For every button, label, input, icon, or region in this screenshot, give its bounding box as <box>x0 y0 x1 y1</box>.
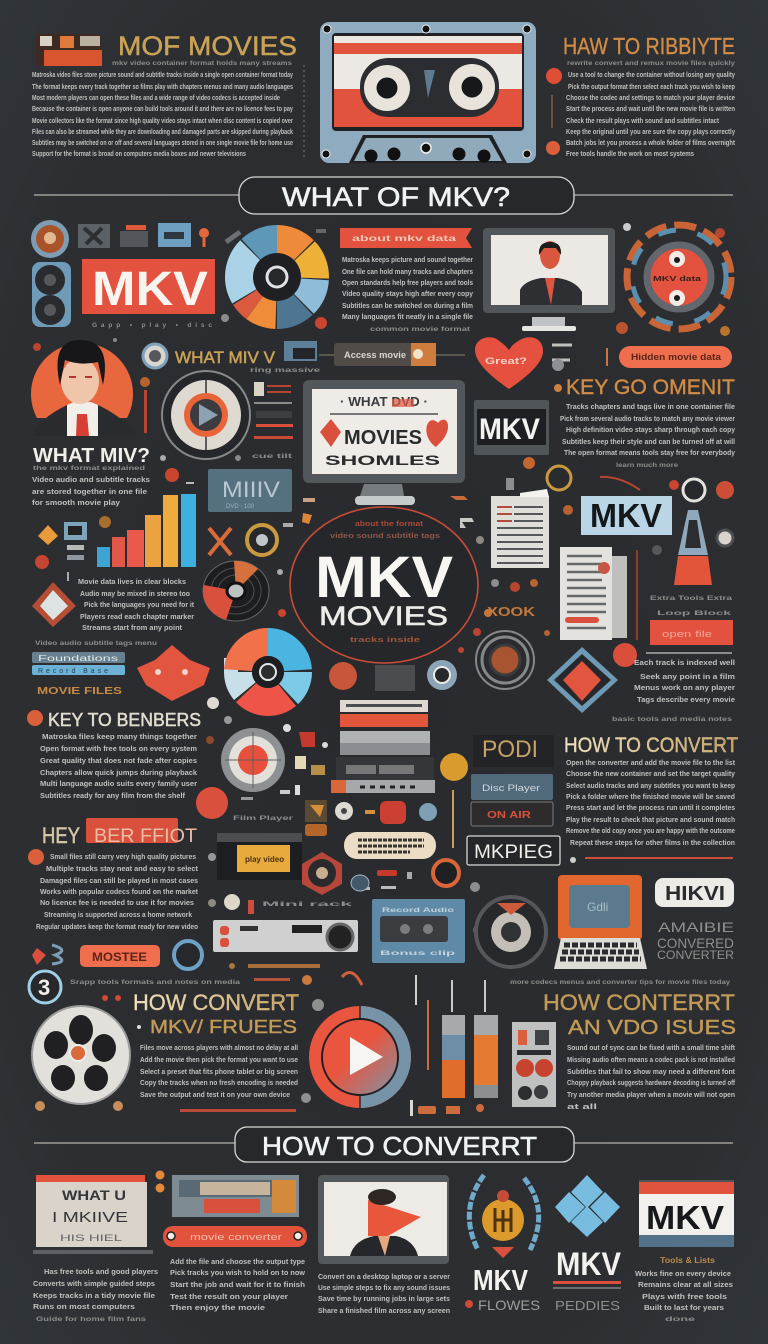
projector <box>213 920 358 952</box>
text block: intro left: mkv video container format holds many streams <box>112 60 292 67</box>
blue media card: MIIIV <box>222 477 280 502</box>
subheading: av issues: AN VDO ISUES <box>568 1017 736 1039</box>
text block: intro left: Files can also be streamed while they are downloading and damaged parts are skipped during playback <box>32 127 294 136</box>
converter caption: CONVERTER <box>657 948 734 962</box>
text block: bottom left: Runs on most computers <box>33 1302 135 1311</box>
text block: key to benbers: Matroska files keep many things together <box>42 732 197 741</box>
text block: bottom left: Has free tools and good players <box>44 1267 158 1276</box>
text block: what miv: Video audio and subtitle tracks <box>32 475 150 484</box>
monitor with presenter <box>483 228 615 331</box>
central mkv movies badge: video sound subtitle tags <box>330 533 440 540</box>
blue cassette card: Bonus clip <box>380 950 455 957</box>
text block: hey benefit <box>28 849 198 931</box>
bottom card: what is mkv: HIS HIEL <box>60 1233 122 1243</box>
text block: key to benbers <box>40 732 198 800</box>
blue media card <box>208 469 292 512</box>
text block: intro left <box>32 60 294 158</box>
media screenshot strip <box>172 1175 299 1217</box>
text block: key content: Pick from several audio tracks to match any movie viewer <box>560 414 735 423</box>
text block: intro right <box>566 60 736 158</box>
text block: key content: Subtitles keep their style and can be turned off at will <box>562 437 735 446</box>
mkpieg box <box>467 836 560 865</box>
row of glyphs <box>233 790 453 848</box>
orange label: xook: XOOK <box>487 604 536 619</box>
red ribbon: about mkv data <box>352 234 457 243</box>
text block: how to convert: Play the result to check that picture and sound match <box>566 815 735 824</box>
text block: hey benefit: Streaming is supported across a home network <box>44 910 193 919</box>
dark player with yellow screen: play video <box>245 855 284 864</box>
film reel <box>32 1006 130 1104</box>
dark player with yellow screen <box>217 833 302 880</box>
red banner with caption: Loop Block <box>657 610 732 617</box>
text block: av issues: Missing audio often means a codec pack is not installed <box>567 1055 735 1064</box>
heading: how converrt: HOW CONTERRT <box>543 990 735 1015</box>
text block: bottom center <box>318 1272 450 1315</box>
rings target icon <box>476 631 534 689</box>
text block: bottom left <box>33 1267 158 1323</box>
emblem dark red <box>302 852 342 895</box>
subheading: mkv fruees: MKV/ FRUEES <box>150 1017 297 1037</box>
vinyl record <box>203 561 269 621</box>
icon group with pill <box>32 941 202 969</box>
text block: bottom left: Guide for home film fans <box>36 1316 147 1323</box>
icon: speaker <box>32 262 71 327</box>
heading: how to rewrite: HAW TO RIBBIYTE <box>563 33 735 59</box>
text block: what miv: for smooth movie play <box>32 498 121 507</box>
glyph cluster near pill <box>552 345 607 371</box>
big play button <box>309 1006 411 1108</box>
text block: how convert: Save the output and test it on your own device <box>140 1090 290 1099</box>
diamond compass icon <box>32 582 76 627</box>
red ribbon <box>340 228 472 248</box>
text block: how to convert: Open the converter and add the movie file to the list <box>566 758 735 767</box>
mkpieg box: MKPIEG <box>474 842 553 863</box>
text block: bottom left: Converts with simple guided steps <box>33 1279 155 1288</box>
text block: ribbon paragraph: Video quality stays high after every copy <box>342 289 474 298</box>
text block: key content <box>560 402 736 469</box>
target icon <box>221 728 285 792</box>
label row: what miv v: ring massive <box>250 367 321 374</box>
text block: intro left: Matroska video files store picture sound and subtitle tracks inside a single open container format today <box>32 70 294 79</box>
hikvi card: HIKVI <box>665 883 725 905</box>
heading: hey benefit: HEY <box>42 823 80 848</box>
blue card and red card: ON AIR <box>487 810 532 821</box>
text block: left middle: Players read each chapter marker <box>80 612 194 621</box>
icon: crossed tools and ring <box>209 525 277 555</box>
blue diamonds logo <box>555 1175 620 1237</box>
text block: right of diamond: Menus work on any player <box>634 683 735 692</box>
orange retro computer <box>554 875 647 969</box>
scattered small glyphs <box>33 223 730 985</box>
text block: key content: learn much more <box>616 462 678 469</box>
color wheel 1 <box>240 240 314 314</box>
text block: bottom mid left: Then enjoy the movie <box>170 1303 265 1312</box>
text block: av issues: at all <box>567 1102 597 1111</box>
heading: how to convert: HOW TO CONVERT <box>564 734 738 757</box>
play disc icon <box>162 371 250 459</box>
orange pill <box>619 346 732 368</box>
text block: intro left: Because the container is open anyone can build tools around it and there are no licence fees to pay <box>32 104 294 113</box>
small list beside disc: cue tilt <box>252 453 294 460</box>
text block: av issues <box>567 1043 735 1111</box>
text block: ribbon paragraph: Open standards help free players and tools <box>342 278 473 287</box>
converter caption <box>657 919 734 962</box>
text block: how to convert: Press start and let the process run until it completes <box>566 803 735 812</box>
bottom card: what is mkv: WHAT U <box>62 1187 126 1203</box>
blue labels left: Video audio subtitle tags menu <box>35 640 157 647</box>
caption row of icons: Mini rack <box>262 901 353 908</box>
text block: how convert: Copy the tracks when no fresh encoding is needed <box>140 1078 298 1087</box>
text block: hey benefit: No licence fee is needed to use it for movies <box>40 898 194 907</box>
red banner with caption: Extra Tools Extra <box>650 595 733 602</box>
icon: timeline dots <box>304 65 562 157</box>
heading: mof movies: MOF MOVIES <box>118 31 297 61</box>
heart badge: Great? <box>485 356 527 366</box>
blue cassette card: Record Audio <box>382 907 454 914</box>
circular arrows badge: MKV data <box>653 276 701 283</box>
circular arrows badge <box>627 225 731 329</box>
text block: bottom left: Keeps tracks in a tidy movie file <box>33 1291 155 1300</box>
text block: right of diamond: Tags describe every movie <box>637 695 735 704</box>
pill: what label: Access movie <box>344 350 406 360</box>
bottom monitor with figure <box>318 1175 449 1264</box>
mkv peddies label <box>553 1246 622 1313</box>
text block: right of diamond: basic tools and media notes <box>612 716 733 723</box>
small caption row: Gapp • play • disc <box>92 322 212 329</box>
central monitor: MOVIES <box>344 427 422 449</box>
text block: hey benefit: Regular updates keep the format ready for new video <box>36 922 198 931</box>
central monitor: · WHAT DVD · <box>340 394 428 409</box>
text block: bottom mid left: Pick tracks you wish to hold on to now <box>170 1268 305 1277</box>
orange retro computer: Gdli <box>587 900 608 914</box>
red pill <box>163 1226 307 1247</box>
bottom card: what is mkv: I MKIIVE <box>52 1209 128 1226</box>
orange dots <box>156 1170 164 1192</box>
ring orange <box>433 860 459 886</box>
numbered badge 3: 3 <box>38 975 50 1000</box>
central monitor: SHOMLES <box>325 452 440 468</box>
text block: intro left: The format keeps every track together so films play with chapters menus and many audio languages <box>32 82 293 91</box>
text block: key to benbers: Multi language audio suits every family user <box>40 779 197 788</box>
row of glyphs: Film Player <box>233 815 294 822</box>
section banner: how to converrt <box>34 1127 733 1162</box>
text block: intro left: Subtitles may be switched on or off and several languages stored in one single movie file for home use <box>32 138 293 147</box>
text block: how to convert: Select audio tracks and any subtitles you want to keep <box>566 781 735 790</box>
text block: bottom center: Use simple steps to fix any sound issues <box>318 1283 450 1292</box>
icon group with pill: MOSTEE <box>92 950 147 964</box>
label: podi: PODI <box>482 736 538 763</box>
text block: how to convert <box>566 758 736 847</box>
heading: what miv: WHAT MIV? <box>33 445 150 467</box>
glyphs near play <box>35 999 484 1116</box>
text block: av issues: Sound out of sync can be fixed with a small time shift <box>567 1043 735 1052</box>
text block: intro left: Movie collectors like the format since high quality video stays intact when disc content is copied over <box>32 116 293 125</box>
text block: bottom right: Built to last for years <box>644 1303 724 1312</box>
text block: ribbon paragraph: Subtitles can be switched on during a film <box>342 301 473 310</box>
gold caption: MOVIE FILES <box>37 686 122 697</box>
text block: left middle: Streams start from any point <box>82 623 182 632</box>
mkv white card: MKV <box>646 1199 724 1236</box>
text block: key content: The open format means tools stay free for everybody <box>564 448 736 457</box>
text block: bottom center: Share a finished film across any screen <box>318 1306 450 1315</box>
equipment stack <box>331 700 435 793</box>
text block: what miv <box>32 465 150 507</box>
mkv dark screen <box>474 400 549 455</box>
text block: key to benbers: Open format with free tools on every system <box>40 744 197 753</box>
blue labels left: Record Base <box>38 668 108 675</box>
text block: how to convert: Repeat these steps for other films in the collection <box>570 838 735 847</box>
control panel <box>512 1022 556 1107</box>
blue card and red card: Disc Player <box>482 783 540 793</box>
mkv flowes label: MKV <box>473 1265 529 1297</box>
heading: hey benefit: BER FFIOT <box>94 826 197 847</box>
text block: ribbon paragraph: Matroska keeps picture and sound together <box>342 255 473 264</box>
text block: bottom right: done <box>665 1316 696 1323</box>
text block: intro left: Most modern players can open these files and a wide range of video codecs is accepted inside <box>32 93 280 102</box>
mkv white card <box>639 1180 734 1247</box>
text block: ribbon paragraph: Many languages fit neatly in a single file <box>342 312 473 321</box>
text block: bottom center: Save time by running jobs in large sets <box>318 1294 450 1303</box>
blue cassette card <box>372 899 465 963</box>
text block: intro right: rewrite convert and remux movie files quickly <box>567 60 735 67</box>
avatar: man in suit <box>31 340 135 436</box>
text block: bottom mid left: Start the job and wait for it to finish <box>170 1280 305 1289</box>
section banner: what of mkv <box>34 177 733 214</box>
text block: intro left: Support for the format is broad on computers media boxes and newer televisions <box>32 149 246 158</box>
converter caption: CONVERED <box>657 935 734 951</box>
text block: how convert: Files move across players with almost no delay at all <box>140 1043 298 1052</box>
red banner with caption <box>646 595 733 654</box>
label: podi <box>473 735 554 767</box>
text block: bottom mid left: Add the file and choose the output type <box>170 1257 305 1266</box>
converter caption: AMAIBIE <box>658 919 734 935</box>
small center devices <box>329 660 457 691</box>
mkv blue card: MKV <box>590 497 662 534</box>
icon: speaker disc <box>31 220 69 258</box>
red pill: movie converter <box>190 1232 282 1242</box>
text block: hey benefit: Small files still carry very high quality pictures <box>50 852 196 861</box>
text block: key content: Tracks chapters and tags live in one container file <box>566 402 735 411</box>
numbered badge 3 <box>29 971 61 1003</box>
text block: how to convert: Choose the new container and set the target quality <box>566 769 736 778</box>
film wheel emblem <box>476 897 546 967</box>
bottom card: what is mkv <box>33 1175 153 1254</box>
heading: how convert: HOW CONVERT <box>133 990 299 1015</box>
label row: what miv v: WHAT MIV V <box>175 348 276 367</box>
text block: hey benefit: Damaged files can still be played in most cases <box>40 876 198 885</box>
small list beside disc <box>252 382 294 460</box>
icon: film strip collage <box>36 34 102 66</box>
text block: key content: High definition video stays sharp through each copy <box>566 425 736 434</box>
central mkv movies badge: MOVIES <box>319 601 448 631</box>
section banner: how to converrt: HOW TO CONVERRT <box>262 1131 537 1161</box>
red gem diamond <box>547 647 618 713</box>
document 2 <box>560 547 627 640</box>
text block: bottom right: Remains clear at all sizes <box>638 1280 733 1289</box>
text block: how to convert: Pick a folder where the finished movie will be saved <box>566 792 735 801</box>
heading: key go omenit: KEY GO OMENIT <box>566 376 735 399</box>
caption row of icons <box>224 894 353 914</box>
mkv red logo: MKV <box>92 263 208 316</box>
text block: key to benbers: Great quality that does not fade after copies <box>40 756 197 765</box>
text block: hey benefit: Works with popular codecs found on the market <box>40 887 198 896</box>
text block: what miv: are stored together in one file <box>32 487 147 496</box>
text block: av issues: Try another media player when a movie will not open <box>567 1090 735 1099</box>
text block: hey benefit: Multiple tracks stay neat and easy to select <box>46 864 198 873</box>
text block: key to benbers: Subtitles ready for any film from the shelf <box>40 791 185 800</box>
text block: right of diamond: Each track is indexed well <box>634 658 735 667</box>
text block: right of diamond <box>612 658 735 723</box>
orange pill: Hidden movie data <box>631 352 722 362</box>
red gem icon <box>137 645 210 701</box>
red banner with caption: open file <box>662 629 712 639</box>
text block: how convert: Select a preset that fits phone tablet or big screen <box>140 1067 298 1076</box>
red progress line <box>570 857 733 863</box>
icon: cassette tape <box>320 22 536 163</box>
mkv peddies label: PEDDIES <box>555 1298 620 1313</box>
bar chart <box>97 494 196 567</box>
heading: key to benbers: KEY TO BENBERS <box>48 710 201 730</box>
laurel medal <box>469 1175 539 1258</box>
mkv flowes label: FLOWES <box>478 1297 540 1313</box>
heading: hey benefit <box>42 818 197 848</box>
text block: ribbon paragraph: common movie format <box>370 326 471 333</box>
document 1 <box>491 489 549 568</box>
section banner: what of mkv: WHAT OF MKV? <box>282 182 510 212</box>
cream pill <box>344 832 436 859</box>
text block: right of diamond: Seek any point in a film <box>640 672 735 681</box>
text block: how convert: Add the movie then pick the format you want to use <box>140 1055 298 1064</box>
text block: left middle: Pick the languages you need for it <box>84 600 194 609</box>
text block: key to benbers: Chapters allow quick jumps during playback <box>40 768 198 777</box>
red coin <box>196 787 228 819</box>
blue media card: DVD · 100 <box>226 504 255 510</box>
tower icon <box>674 479 734 585</box>
pill: what label <box>319 343 465 366</box>
color wheel 2 <box>238 642 298 702</box>
text block: left middle: Movie data lives in clear blocks <box>78 577 186 586</box>
text block: bottom right: Tools & Lists <box>660 1256 716 1265</box>
text block: left middle: Audio may be mixed in stereo too <box>80 589 190 598</box>
blue labels left: Foundations <box>38 654 118 663</box>
divider caption row: more codecs menus and converter tips for movie files today <box>510 979 730 986</box>
hikvi card <box>655 878 734 907</box>
mkv flowes label <box>465 1265 540 1313</box>
text block: what miv: the mkv format explained <box>33 465 145 472</box>
blue labels left <box>32 640 157 675</box>
divider caption row <box>70 975 730 1005</box>
heart badge <box>475 337 543 389</box>
divider caption row: Srapp tools formats and notes on media <box>70 979 241 986</box>
text block: intro right: Free tools handle the work on most systems <box>566 149 694 158</box>
text block: bottom mid left: Test the result on your player <box>170 1292 288 1301</box>
red token <box>613 643 637 667</box>
blue card and red card <box>471 774 553 826</box>
mkv peddies label: MKV <box>556 1246 622 1282</box>
small media thumbnails <box>78 223 240 248</box>
red underline <box>180 1109 296 1112</box>
text block: bottom right: Works fine on every device <box>635 1269 731 1278</box>
text block: ribbon paragraph: One file can hold many tracks and chapters <box>342 267 473 276</box>
text block: av issues: Subtitles that fail to show may need a different font <box>567 1067 735 1076</box>
central monitor <box>303 380 465 505</box>
central mkv movies badge: about the format <box>355 521 424 528</box>
text block: bottom right <box>635 1256 733 1323</box>
text block: left middle <box>78 577 194 632</box>
text block: bottom right: Plays with free tools <box>642 1292 727 1301</box>
central mkv movies badge <box>290 507 478 663</box>
central mkv movies badge: tracks inside <box>350 637 420 644</box>
text block: how convert <box>140 1043 298 1099</box>
mkv dark screen: MKV <box>479 413 540 446</box>
icon cluster: star and device <box>35 522 87 569</box>
text block: ribbon paragraph <box>342 255 474 333</box>
text block: bottom mid left <box>170 1257 305 1312</box>
gold coin <box>440 753 468 781</box>
text block: intro right: Check the result plays with sound and subtitles intact <box>566 116 719 125</box>
tubes <box>428 980 498 1098</box>
label row: what miv v <box>143 341 321 374</box>
central mkv movies badge: MKV <box>315 545 453 610</box>
text block: bottom center: Convert on a desktop laptop or a server <box>318 1272 450 1281</box>
